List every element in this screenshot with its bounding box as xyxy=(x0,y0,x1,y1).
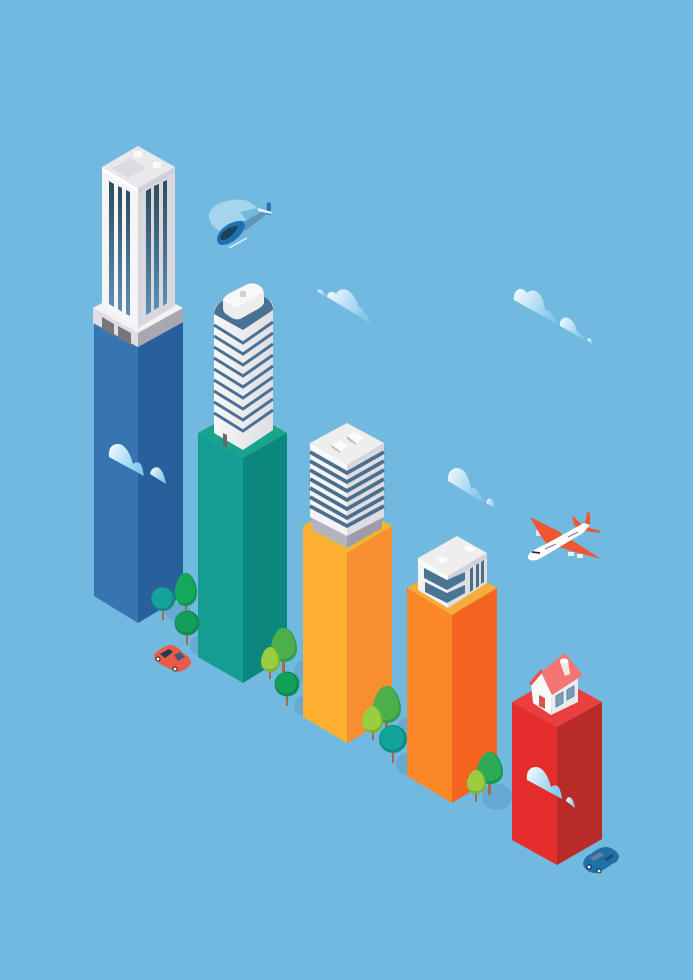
tower xyxy=(102,172,138,328)
red car xyxy=(154,645,191,672)
body xyxy=(217,221,245,245)
base plate xyxy=(93,283,183,333)
floors xyxy=(310,452,384,526)
wings xyxy=(530,517,564,546)
cloud mid right xyxy=(448,468,495,508)
cloud on blue bar xyxy=(109,444,166,484)
bar 1: blue xyxy=(94,322,183,623)
roof units xyxy=(134,151,142,157)
trees xyxy=(151,573,503,802)
fuselage xyxy=(528,523,590,560)
penthouse xyxy=(223,283,264,319)
roof xyxy=(310,423,384,465)
engines xyxy=(536,530,541,536)
building 2: rounded tower xyxy=(214,283,273,450)
tree group 2 xyxy=(261,628,300,706)
airplane xyxy=(528,512,601,560)
windows xyxy=(109,181,114,307)
cloud near tower 2 xyxy=(317,289,370,323)
tail fins xyxy=(572,515,582,529)
helicopter xyxy=(209,200,272,248)
tree group 3 xyxy=(362,686,407,763)
tree group 4 xyxy=(467,752,503,802)
building 1: white skyscraper xyxy=(93,146,183,347)
building 4: low office xyxy=(418,536,487,608)
clouds upper right xyxy=(514,289,593,345)
building 5: house xyxy=(529,653,583,715)
bar 3: yellow xyxy=(303,500,392,743)
blue car xyxy=(583,847,619,873)
rotor xyxy=(209,200,258,232)
tree group 1 xyxy=(151,573,200,645)
tail xyxy=(240,210,267,231)
bar 5: red xyxy=(512,677,602,865)
building 3: striped office xyxy=(310,423,384,548)
bar 2: teal xyxy=(198,408,287,683)
cloud on red bar xyxy=(527,767,575,808)
bar 4: orange xyxy=(407,562,497,803)
floor stripes xyxy=(214,322,273,431)
ground shadows xyxy=(165,603,512,810)
